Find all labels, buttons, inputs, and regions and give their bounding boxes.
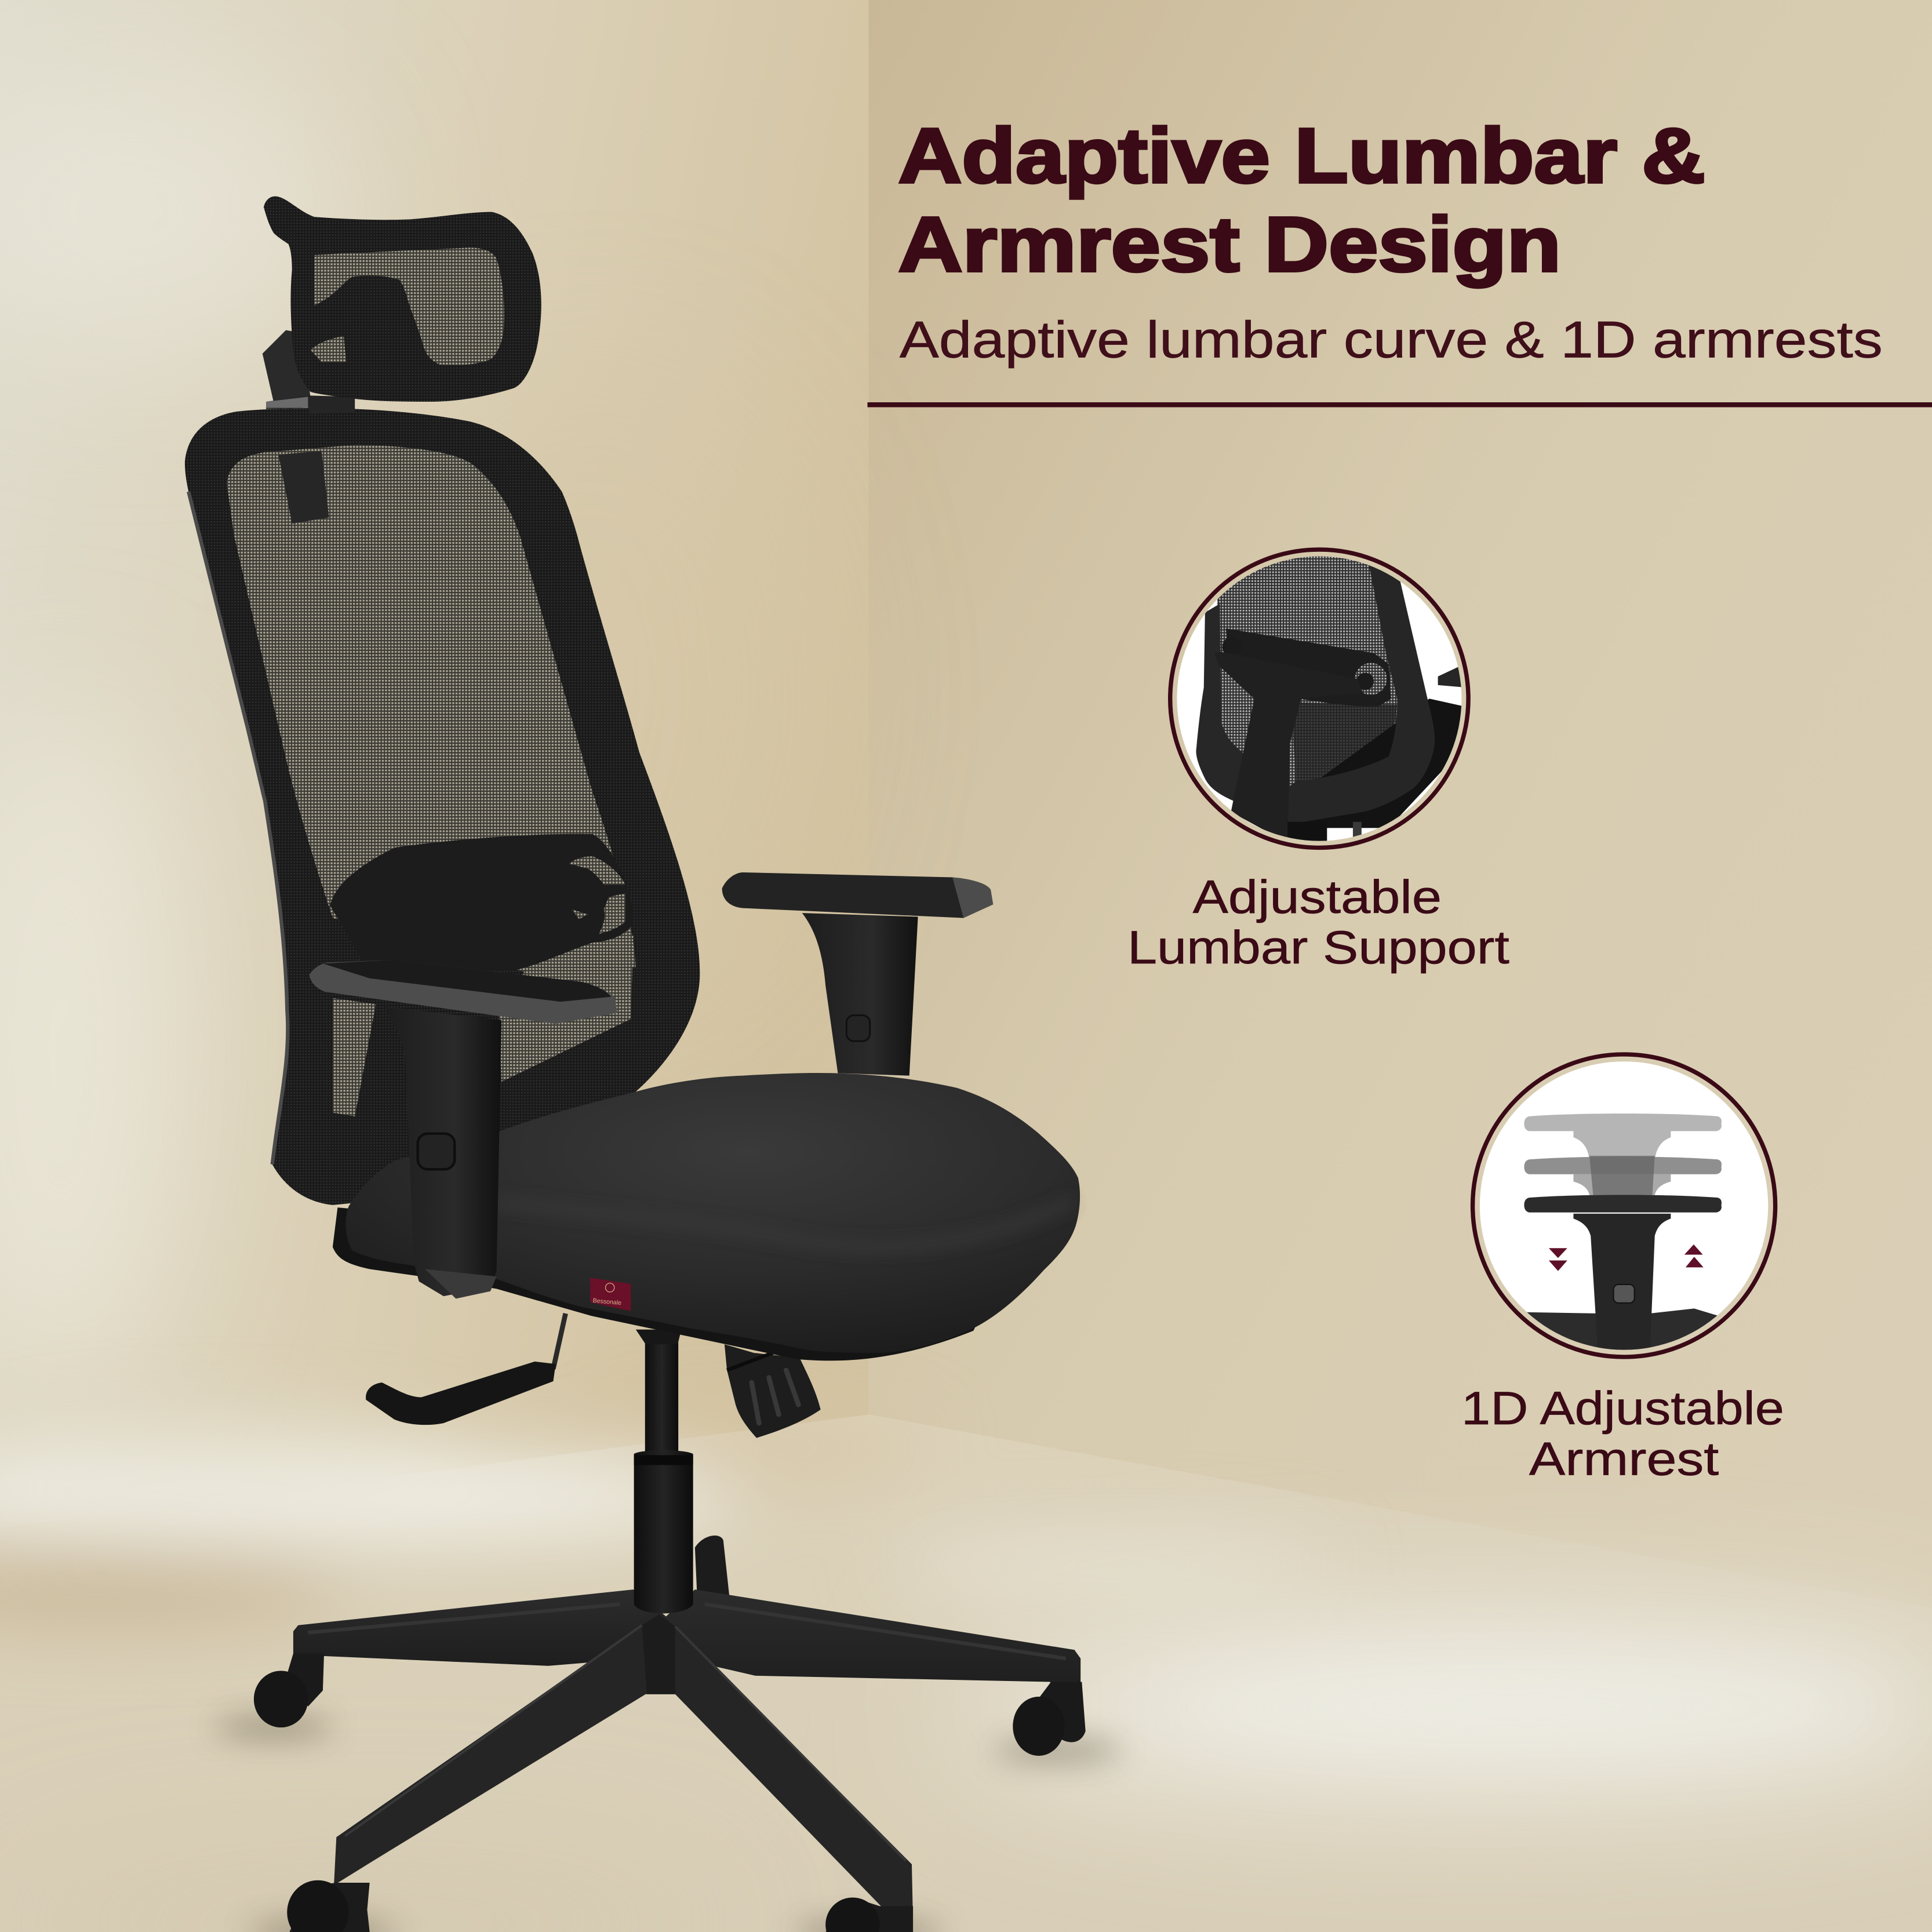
seat brand label (590, 1278, 631, 1311)
armrest pad (1524, 1195, 1722, 1213)
chair base: five star legs (293, 1536, 1080, 1922)
label: 1D adjustable armrest (1461, 1382, 1784, 1485)
inset armrest illustration (1479, 1060, 1769, 1355)
ghost armrest upper (1524, 1114, 1722, 1160)
inset ring (1170, 550, 1468, 847)
headrest (263, 197, 541, 414)
label: adjustable lumbar support: Lumbar Support (1127, 922, 1509, 974)
armrest post (1573, 1214, 1671, 1355)
label: 1D adjustable armrest: 1D Adjustable (1461, 1382, 1784, 1435)
title heading: Adaptive Lumbar & (898, 113, 1705, 199)
caster shadows (214, 1716, 1121, 1932)
near armrest (310, 960, 617, 1298)
inset ring (1473, 1054, 1775, 1357)
up arrows (1684, 1245, 1704, 1267)
seat brand label: Bessonale (592, 1297, 622, 1307)
lower mesh windows (499, 935, 634, 1082)
caster wheels (254, 1654, 1086, 1932)
title heading: Armrest Design (898, 202, 1561, 288)
subtitle: Adaptive lumbar curve & 1D armrests (900, 310, 1883, 368)
down arrows (1549, 1248, 1567, 1271)
title heading (898, 113, 1705, 288)
headrest mesh panels (314, 248, 504, 365)
office chair (185, 197, 1086, 1932)
label: 1D adjustable armrest: Armrest (1529, 1433, 1719, 1485)
headrest strap (278, 451, 329, 523)
tilt knob (725, 1344, 821, 1438)
height adjustment lever (366, 1314, 566, 1425)
far armrest (722, 872, 993, 1076)
seat cushion (333, 1073, 1080, 1360)
inset: adjustable lumbar support (1170, 550, 1468, 847)
inset photo of lumbar (1176, 555, 1467, 844)
backrest mesh panel (227, 445, 636, 973)
label: adjustable lumbar support (1127, 871, 1509, 974)
ghost armrest middle (1524, 1156, 1722, 1195)
label: adjustable lumbar support: Adjustable (1193, 871, 1442, 923)
inset: 1D adjustable armrest (1473, 1054, 1775, 1357)
gas lift cylinder (634, 1330, 693, 1614)
backrest frame (185, 408, 700, 1205)
seat edge (1526, 1308, 1719, 1355)
lumbar support pad (330, 834, 634, 973)
armrest height button (418, 1134, 454, 1169)
